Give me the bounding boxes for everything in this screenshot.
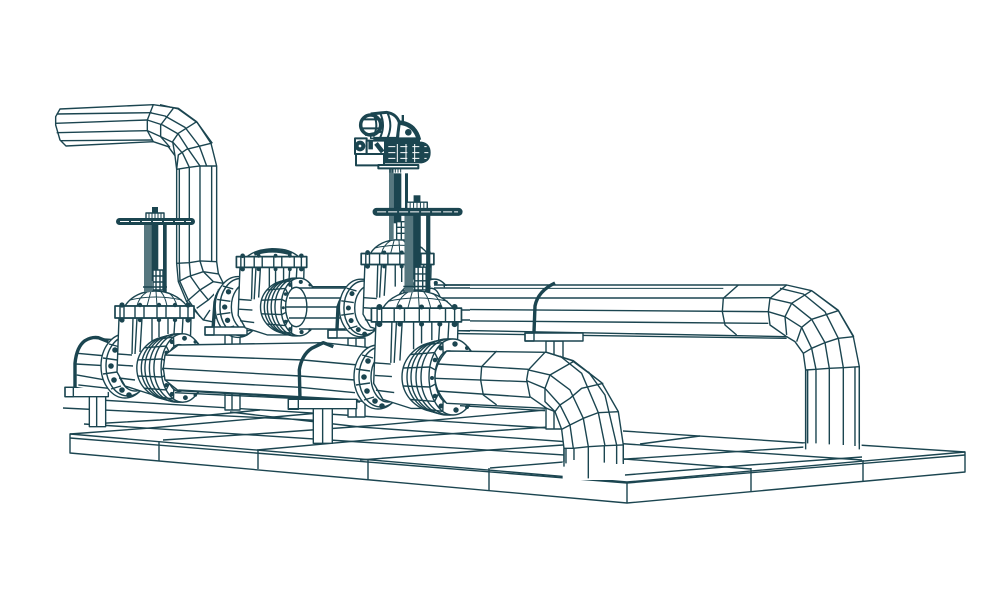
back left gate valve — [236, 249, 307, 335]
platform base — [70, 434, 965, 503]
back mid pipe clamp — [337, 278, 368, 329]
front mid flange — [354, 345, 405, 409]
front post under mid pipe — [313, 408, 332, 443]
front right pipe with elbow — [435, 351, 625, 480]
front mid pipe — [163, 343, 370, 409]
back right clamp and saddle — [525, 283, 583, 429]
front left gate valve — [115, 207, 195, 394]
upper left elbow pipe — [56, 105, 223, 323]
back mid flange — [339, 279, 385, 337]
front right flange — [402, 339, 479, 415]
front right gate valve with handwheel — [371, 195, 463, 408]
valve stem under actuator — [389, 168, 408, 240]
front left post and saddle — [65, 387, 108, 427]
actuated gate valve body — [361, 240, 434, 334]
back saddle supports — [205, 327, 360, 338]
electric actuator — [355, 112, 431, 173]
front left crescent flange — [101, 334, 152, 398]
support posts: back row — [225, 335, 365, 417]
back rear flange — [396, 279, 470, 337]
front left pipe stub — [75, 335, 130, 397]
floor grid — [63, 400, 965, 477]
back flange at elbow — [213, 277, 264, 337]
back flange front face — [261, 278, 345, 336]
long back pipe with elbow — [440, 285, 862, 452]
back mid pipe — [282, 287, 360, 328]
front left flange — [137, 334, 206, 402]
